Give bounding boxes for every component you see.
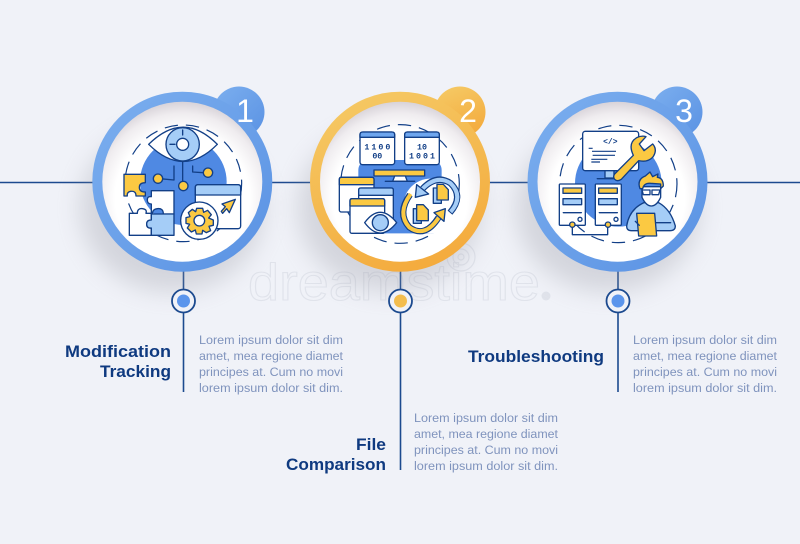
text block 1: amet, mea regione diamet <box>199 349 344 363</box>
step 3 circle <box>516 86 708 292</box>
watermark: dreamstime <box>248 254 540 312</box>
code tag: </> <box>603 138 618 147</box>
connector lines <box>184 270 618 470</box>
text block 3: lorem ipsum dolor sit dim. <box>633 381 777 395</box>
number 3: 3 <box>675 93 693 129</box>
icon: file comparison <box>339 125 459 243</box>
text block 3: principes at. Cum no movi <box>633 365 777 379</box>
text block 1 <box>199 333 344 395</box>
step 1 circle <box>80 86 272 292</box>
heading: file comparison: Comparison <box>286 455 386 474</box>
icon: modification tracking <box>124 125 242 242</box>
heading: modification tracking: Tracking <box>100 362 171 381</box>
text block 1: principes at. Cum no movi <box>199 365 343 379</box>
text block 3: amet, mea regione diamet <box>633 349 778 363</box>
text block 3 <box>633 333 778 395</box>
timeline line <box>0 182 800 184</box>
heading: troubleshooting: Troubleshooting <box>468 347 604 366</box>
binary labels: 10 <box>417 142 427 152</box>
node 1 <box>172 290 195 312</box>
node 2 <box>389 290 412 312</box>
binary labels: 1001 <box>409 152 435 162</box>
number 1: 1 <box>236 93 254 129</box>
text block 2: lorem ipsum dolor sit dim. <box>414 459 558 473</box>
text block 1: Lorem ipsum dolor sit dim <box>199 333 343 347</box>
text block 2: Lorem ipsum dolor sit dim <box>414 411 558 425</box>
text block 2: principes at. Cum no movi <box>414 443 558 457</box>
heading: file comparison <box>286 435 386 474</box>
heading: file comparison: File <box>356 435 386 454</box>
heading: modification tracking <box>65 342 171 381</box>
step 2 circle <box>298 86 490 292</box>
binary labels: 1100 <box>364 142 390 152</box>
icon: troubleshooting <box>559 125 677 243</box>
heading: modification tracking: Modification <box>65 342 171 361</box>
node 3 <box>606 290 630 312</box>
text block 2 <box>414 411 559 473</box>
text block 1: lorem ipsum dolor sit dim. <box>199 381 343 395</box>
text block 3: Lorem ipsum dolor sit dim <box>633 333 777 347</box>
number 2: 2 <box>459 93 477 129</box>
binary labels: 00 <box>372 152 382 162</box>
text block 2: amet, mea regione diamet <box>414 427 559 441</box>
binary labels <box>364 142 435 162</box>
